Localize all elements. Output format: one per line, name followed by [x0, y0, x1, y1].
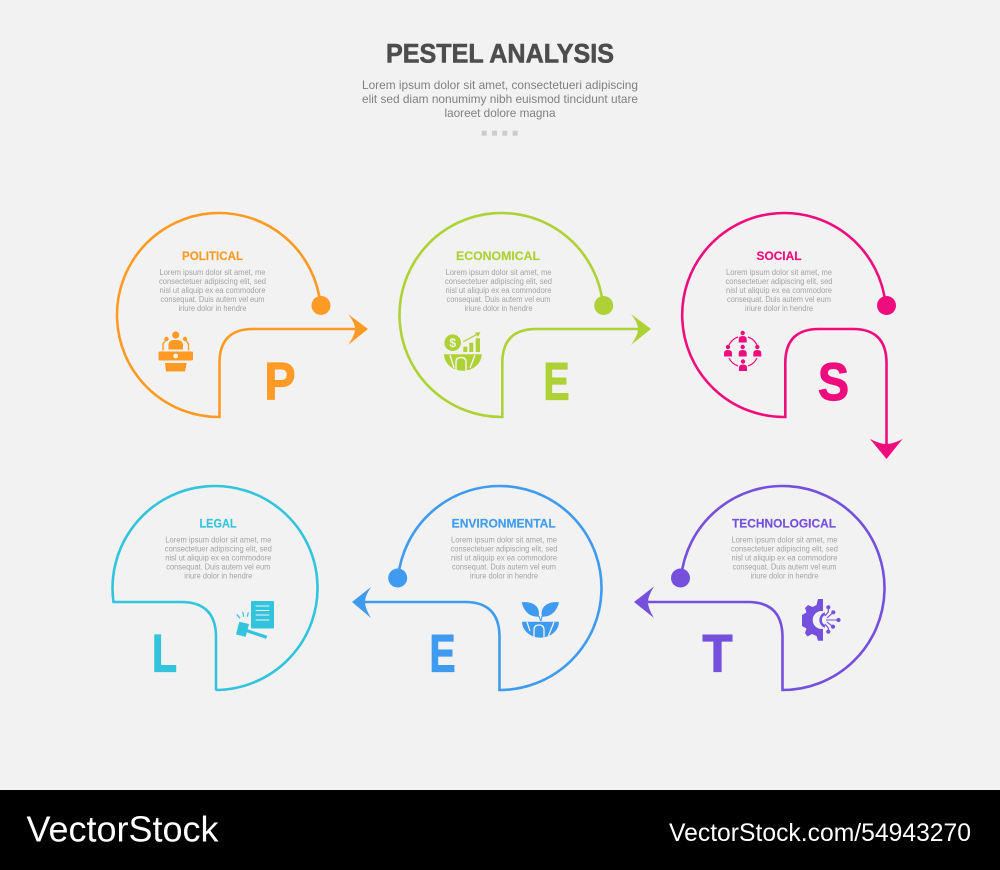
legal body text [165, 536, 272, 580]
panel: legal [113, 486, 318, 690]
political body text: consequat. Duis autem vel eum [160, 295, 265, 304]
social body text: consequat. Duis autem vel eum [727, 295, 831, 304]
letter P: P [264, 352, 296, 412]
technological body text: Lorem ipsum dolor sit amet, me [732, 536, 838, 544]
social body text: iriure dolor in hendre [745, 304, 814, 313]
icon: money growth bowl [444, 332, 482, 371]
social body text: Lorem ipsum dolor sit amet, me [726, 268, 833, 277]
economical body text: Lorem ipsum dolor sit amet, me [446, 268, 552, 277]
subtitle text: Lorem ipsum dolor sit amet, consectetueri adipiscing [362, 78, 638, 92]
economical outline and arrow [399, 213, 651, 417]
technological body text: iriure dolor in hendre [750, 572, 819, 580]
economical body text: consequat. Duis autem vel eum [446, 295, 551, 304]
political body text: Lorem ipsum dolor sit amet, me [160, 268, 266, 277]
environmental body text [450, 536, 558, 580]
panel: economical [399, 213, 651, 417]
political body text [159, 268, 266, 313]
technological body text: consequat. Duis autem vel eum [732, 562, 837, 572]
technological heading: TECHNOLOGICAL [732, 516, 836, 530]
social heading: SOCIAL [756, 249, 802, 263]
political outline and arrow [117, 213, 368, 417]
icon: gavel and document [236, 601, 274, 637]
social body text: consectetuer adipiscing elit, sed [726, 277, 832, 286]
political body text: nisl ut aliquip ex ea commodore [160, 286, 266, 295]
subtitle text: elit sed diam nonumimy nibh euismod tincidunt utare [362, 92, 638, 106]
legal heading: LEGAL [200, 516, 236, 530]
letter E: E [430, 624, 456, 684]
environmental body text: iriure dolor in hendre [470, 572, 539, 580]
icon: money growth bowl: $ [449, 336, 456, 350]
economical body text: consectetuer adipiscing elit, sed [445, 277, 552, 286]
letter E: E [544, 352, 570, 412]
economical body text: nisl ut aliquip ex ea commodore [446, 286, 552, 295]
economical body text [445, 268, 552, 313]
legal body text: consequat. Duis autem vel eum [166, 562, 271, 572]
legal body text: consectetuer adipiscing elit, sed [165, 544, 272, 554]
letter S: S [818, 353, 849, 412]
political heading: POLITICAL [182, 249, 243, 263]
panel: political [117, 213, 368, 417]
legal body text: Lorem ipsum dolor sit amet, me [165, 536, 272, 544]
legal body text: iriure dolor in hendre [184, 572, 253, 580]
title: PESTEL ANALYSIS [386, 38, 614, 68]
environmental body text: consequat. Duis autem vel eum [452, 562, 556, 572]
panel: environmental [352, 486, 602, 690]
political body text: iriure dolor in hendre [178, 304, 247, 313]
technological body text: nisl ut aliquip ex ea commodore [732, 554, 838, 562]
letter L: L [152, 624, 177, 684]
political body text: consectetuer adipiscing elit, sed [159, 277, 266, 286]
social body text: nisl ut aliquip ex ea commodore [726, 286, 833, 295]
pagination dots [482, 131, 518, 136]
icon: podium [158, 331, 193, 372]
legal body text: nisl ut aliquip ex ea commodore [165, 554, 272, 562]
environmental heading: ENVIRONMENTAL [452, 516, 556, 530]
technological body text [731, 536, 838, 580]
footer bar [0, 790, 1000, 870]
letter T: T [702, 624, 732, 684]
icon: plant in bowl [522, 602, 559, 638]
environmental outline and arrow [352, 486, 602, 690]
social outline and arrow [682, 213, 902, 459]
panel: social [682, 213, 902, 459]
economical heading: ECONOMICAL [456, 249, 540, 263]
icon: people network [724, 331, 761, 371]
subtitle text: laoreet dolore magna [444, 106, 556, 120]
legal outline [113, 486, 318, 690]
environmental body text: consectetuer adipiscing elit, sed [450, 544, 558, 554]
technological body text: consectetuer adipiscing elit, sed [731, 544, 838, 554]
technological outline and arrow [634, 486, 885, 690]
environmental body text: Lorem ipsum dolor sit amet, me [451, 536, 558, 544]
environmental body text: nisl ut aliquip ex ea commodore [451, 554, 558, 562]
footer logo: VectorStock [26, 808, 219, 850]
economical body text: iriure dolor in hendre [464, 304, 533, 313]
panel: technological [634, 486, 885, 690]
social body text [726, 268, 833, 313]
icon: gear with circuit [802, 599, 841, 641]
subtitle text [362, 78, 638, 120]
footer url: VectorStock.com/54943270 [669, 819, 971, 847]
